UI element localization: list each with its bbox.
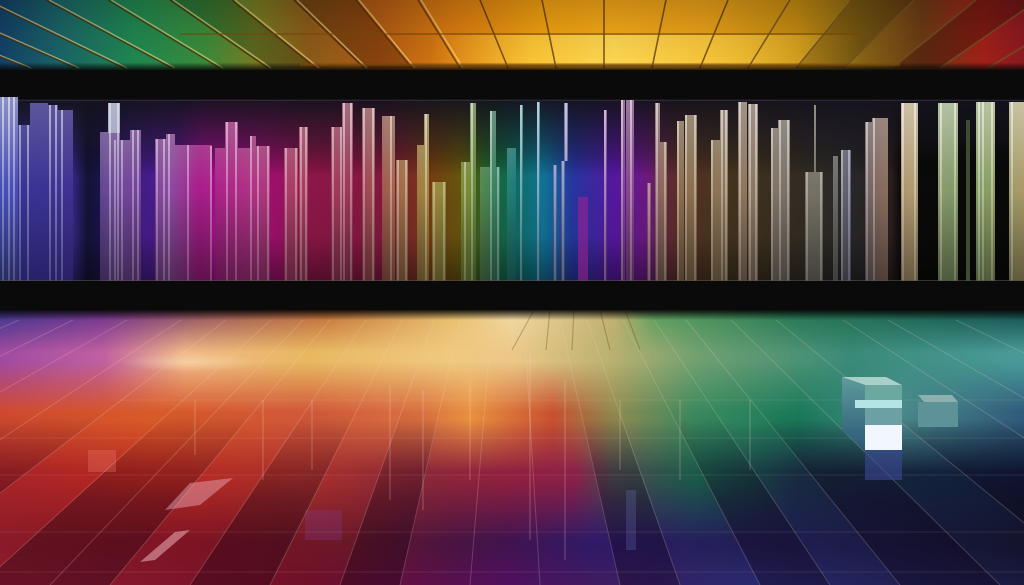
lower black band — [0, 281, 1024, 311]
floor: dark perspective wedges — [0, 422, 1024, 585]
back wall with coloured glow — [0, 99, 1024, 281]
bar chart: glass prism bars — [0, 97, 1024, 282]
upper black band — [0, 70, 1024, 100]
ceiling: rainbow glass panels — [0, 0, 1024, 71]
floor: rainbow glass tiles — [0, 309, 1024, 585]
icon: small glass cube — [918, 395, 958, 427]
icon: large glass cube — [842, 377, 902, 480]
